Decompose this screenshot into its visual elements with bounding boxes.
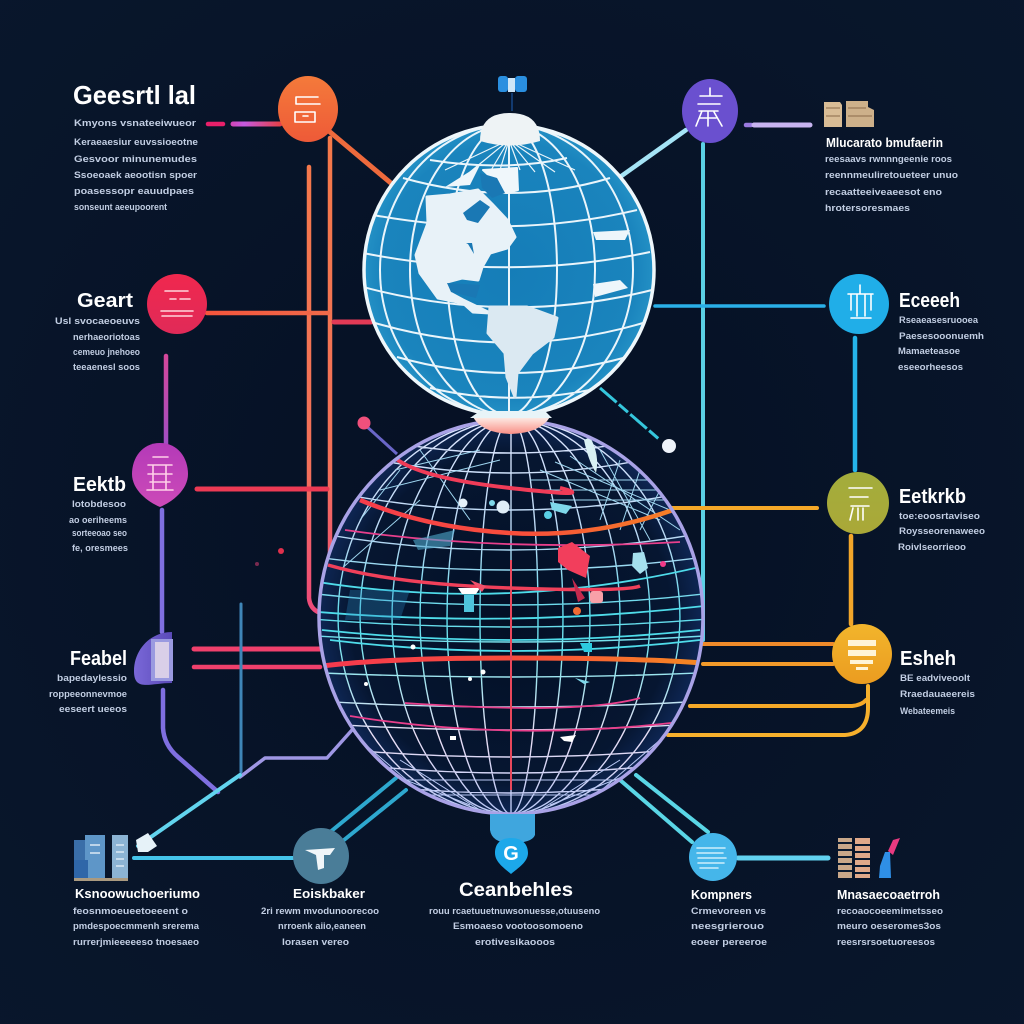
- node: bottom center G: G: [503, 843, 519, 865]
- text: amber block: BE eadviveoolt: [900, 673, 971, 684]
- text: bottom right block: recoaocoeemimetsseo: [837, 906, 943, 917]
- text: sky blue block: Eceeeh: [899, 290, 960, 312]
- text: amber block: Esheh: [900, 648, 956, 670]
- text: bottom buildings block: Ksnoowuchoeriumo: [75, 886, 200, 901]
- text: bottom blue block: neesgrierouo: [691, 921, 764, 932]
- text: bottom slate block: Eoiskbaker: [293, 886, 365, 901]
- text: top-right block: Mlucarato bmufaerin: [826, 135, 943, 150]
- text: bottom buildings block: pmdespoecmmenh srerema: [73, 921, 200, 932]
- node: sky blue: [829, 274, 889, 334]
- lower wireframe globe: [300, 417, 720, 814]
- text: bottom slate block: [261, 886, 379, 948]
- text: sky blue block: eseeorheesos: [898, 362, 963, 373]
- connector lines: left side: [134, 124, 406, 858]
- text: lavender block: [49, 648, 127, 715]
- arctic and eastern islands: [445, 165, 630, 297]
- highlight blobs and dots: [345, 437, 666, 742]
- icon: white pin: [136, 833, 157, 852]
- text: top-right block: recaatteeiveaeesot eno: [825, 187, 942, 198]
- text: top-left block: Geesrtl lal: [73, 80, 196, 110]
- text: amber block: Webateemeis: [900, 706, 955, 717]
- node: bottom center G: [490, 814, 535, 874]
- text: bottom center block: Esmoaeso vootoosomoeno: [453, 921, 583, 932]
- icon: folders top-right: [824, 101, 874, 127]
- text: sky blue block: Mamaeteasoe: [898, 346, 960, 357]
- text: lavender block: roppeeonnevmoe: [49, 689, 127, 700]
- text: top-left block: [73, 80, 198, 213]
- text: sky blue block: Paesesooonuemh: [899, 331, 984, 342]
- text: bottom center block: erotivesikaooos: [475, 937, 555, 948]
- connector lines: right side: [620, 125, 868, 858]
- text: crimson block: Geart: [77, 290, 133, 312]
- link: pink dot: [358, 416, 397, 454]
- text: magenta block: sorteeoao seo: [72, 528, 127, 539]
- node: crimson: [147, 274, 207, 334]
- text: bottom right block: reesrsrsoetuoreesos: [837, 937, 935, 948]
- text: bottom right block: [837, 887, 943, 948]
- node: top-right purple: [682, 79, 738, 143]
- text: bottom blue block: Crmevoreen vs: [691, 906, 766, 917]
- text: magenta block: ao oeriheems: [69, 515, 127, 526]
- dense circuit detail upper right: [340, 450, 690, 570]
- node: slate: [293, 828, 349, 884]
- text: top-left block: Gesvoor minunemudes: [74, 154, 197, 165]
- text: top-right block: [825, 135, 958, 214]
- text: top-left block: Keraeaesiur euvssioeotne: [74, 137, 198, 148]
- upper earth globe: [363, 113, 654, 418]
- latitude and longitude mesh: [320, 424, 702, 812]
- text: olive block: Eetkrkb: [899, 486, 966, 508]
- text: magenta block: Eektb: [73, 474, 126, 496]
- text: lavender block: Feabel: [70, 648, 127, 670]
- icon: chart stack bottom-right: [838, 838, 900, 878]
- text: magenta block: [69, 474, 128, 554]
- text: crimson block: nerhaeoriotoas: [73, 332, 140, 343]
- text: bottom slate block: nrroenk aiio,eaneen: [278, 921, 366, 932]
- text: top-right block: reennmeuliretoueteer unuo: [825, 170, 958, 181]
- text: crimson block: [55, 290, 140, 373]
- node: magenta: [132, 443, 188, 507]
- text: bottom buildings block: feosnmoeueetoeeent o: [73, 906, 188, 917]
- text: olive block: Roysseorenaweeo: [899, 526, 985, 537]
- text: bottom blue block: [691, 887, 767, 948]
- text: bottom blue block: eoeer pereeroe: [691, 937, 767, 948]
- text: bottom right block: meuro oeseromes3os: [837, 921, 941, 932]
- cyan latitudes: [318, 566, 704, 651]
- text: top-left block: poasessopr eauudpaes: [74, 186, 194, 197]
- text: sky blue block: [898, 290, 984, 373]
- pink latitudes: [345, 530, 680, 731]
- text: magenta block: fe, oresmees: [72, 543, 128, 554]
- text: bottom buildings block: rurrerjmieeeeeso tnoesaeo: [73, 937, 199, 948]
- text: bottom slate block: 2ri rewm mvodunoorecoo: [261, 906, 379, 917]
- text: bottom slate block: lorasen vereo: [282, 937, 349, 948]
- icon: buildings bottom-left: [74, 835, 128, 881]
- continent: Greenland: [483, 168, 518, 193]
- text: top-right block: hrotersoresmaes: [825, 203, 910, 214]
- text: top-right block: reesaavs rwnnngeenie roos: [825, 154, 952, 165]
- text: bottom buildings block: [73, 886, 200, 948]
- text: crimson block: teeaenesl soos: [73, 362, 140, 373]
- text: sky blue block: Rseaeasesruooea: [899, 315, 979, 326]
- text: olive block: Roivlseorrieoo: [898, 542, 966, 553]
- globe cap: [473, 417, 550, 434]
- text: bottom center block: rouu rcaetuuetnuwsonuesse,otuuseno: [429, 906, 600, 917]
- lakes and bays: [447, 173, 505, 298]
- node: lavender panel: [134, 632, 173, 685]
- link: white dot: [600, 388, 676, 453]
- node: amber: [832, 624, 892, 684]
- polar fan: [444, 144, 576, 172]
- text: magenta block: lotobdesoo: [72, 499, 126, 510]
- continent: North America: [416, 190, 515, 313]
- text: lavender block: eeseert ueeos: [59, 704, 127, 715]
- continent: South America: [488, 307, 557, 397]
- text: olive block: toe:eoosrtaviseo: [899, 511, 980, 522]
- node: bright blue: [689, 833, 737, 881]
- text: crimson block: cemeuo jnehoeo: [73, 347, 140, 358]
- text: lavender block: bapedaylessio: [57, 673, 127, 684]
- text: amber block: [900, 648, 975, 717]
- small red dots: [255, 548, 284, 566]
- text: top-left block: Kmyons vsnateeiwueor: [74, 118, 196, 129]
- globe top cap: [480, 113, 540, 146]
- node: olive: [827, 472, 889, 534]
- text: top-left block: sonseunt aeeupoorent: [74, 202, 168, 213]
- dense circuit detail bottom: [360, 740, 660, 810]
- text: top-left block: Ssoeoaek aeootisn spoer: [74, 170, 197, 181]
- text: bottom center block: Ceanbehles: [459, 880, 573, 901]
- text: olive block: [898, 486, 985, 553]
- globe base glow: [470, 411, 552, 418]
- icon: top beacon: [498, 76, 527, 111]
- text: amber block: Rraedauaeereis: [900, 689, 975, 700]
- node: top-left orange: [278, 76, 338, 142]
- graticule: [363, 125, 652, 415]
- text: bottom center block: [429, 880, 600, 948]
- text: bottom blue block: Kompners: [691, 887, 752, 902]
- text: bottom right block: Mnasaecoaetrroh: [837, 887, 940, 902]
- text: crimson block: Usl svocaeoeuvs: [55, 316, 140, 327]
- equator and colored bands: [314, 445, 703, 790]
